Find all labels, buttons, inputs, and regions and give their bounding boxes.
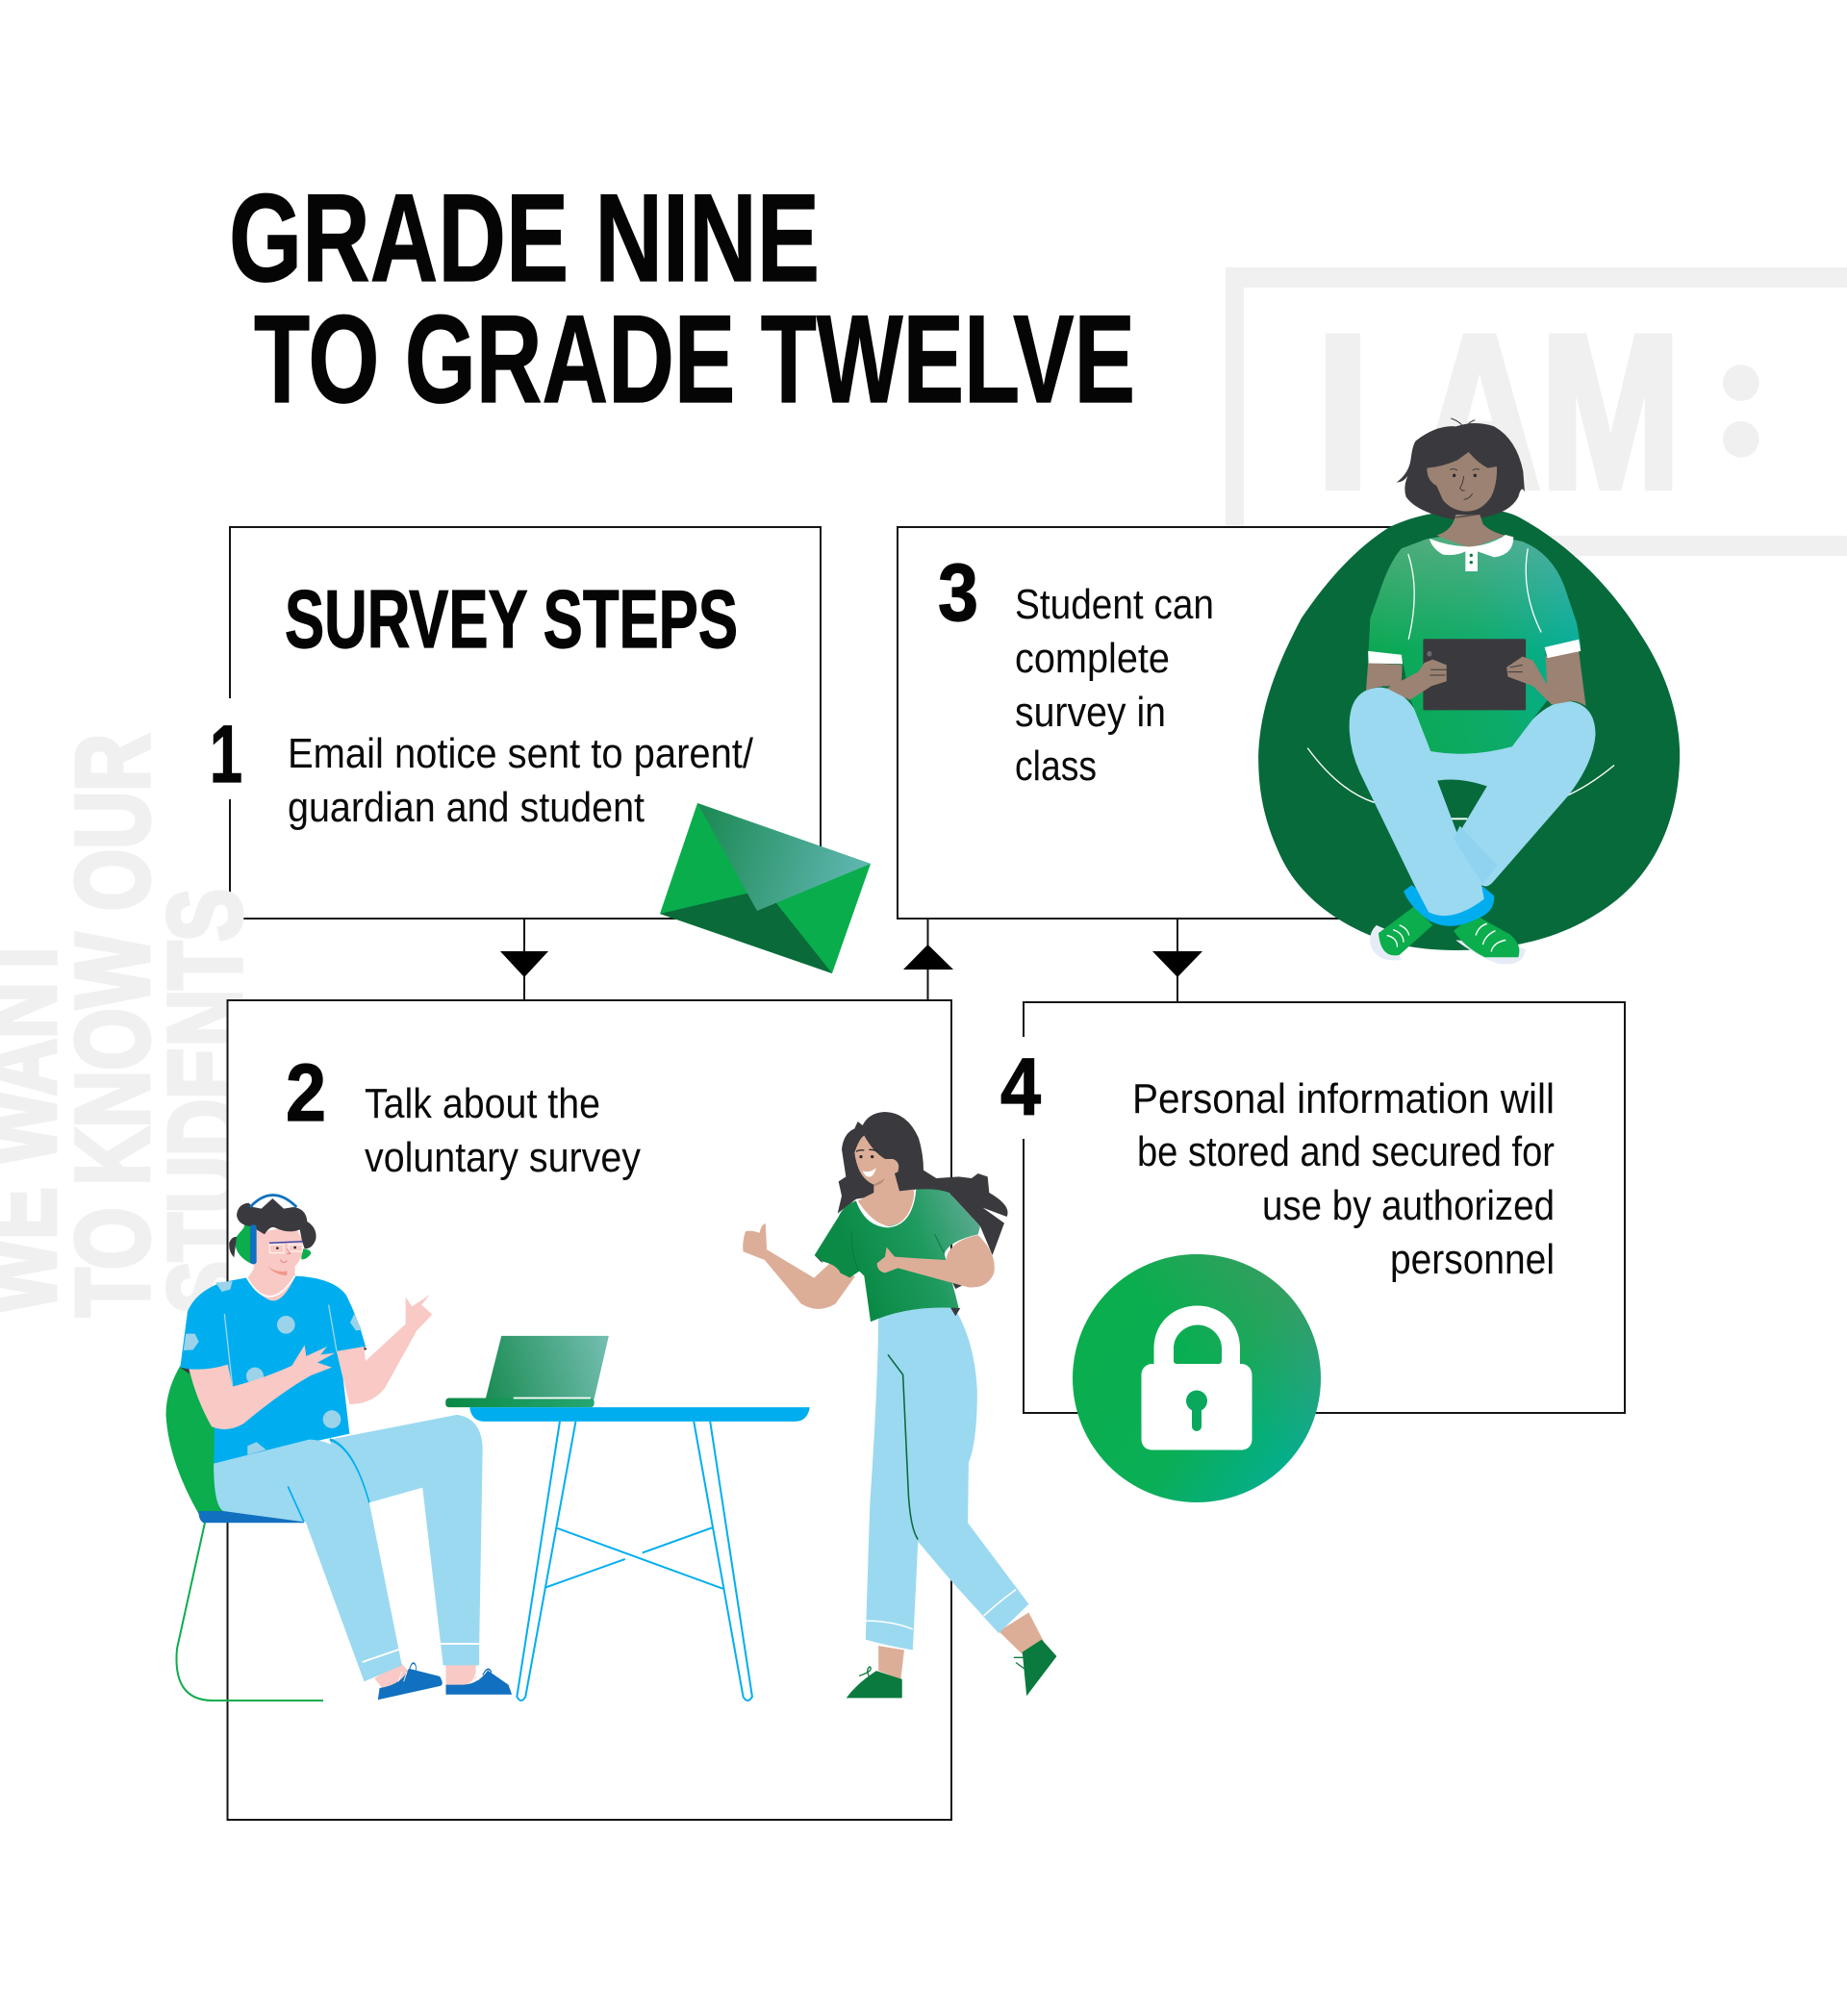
woman right arm and hand [877,1235,995,1287]
hair [1397,418,1525,520]
collar [1430,535,1513,571]
background frame: I AM [1226,267,1847,556]
shoes [1370,906,1526,965]
arrow: step 1 to step 2 [500,919,548,1000]
background frame: I AM: : [1712,294,1771,490]
arrow: step 2 to step 3 [903,919,953,1000]
beanbag creases [1307,748,1614,802]
text: step 3: class [1015,743,1097,790]
arms [1366,651,1586,706]
number 1: 1 [210,709,242,799]
far arm [337,1295,432,1404]
tablet-sitting trousers [1350,688,1596,926]
woman shoes [847,1640,1056,1698]
woman shirt [815,1189,980,1322]
text: step 3: survey in [1015,689,1166,736]
icon: envelope [660,803,871,973]
man trousers and shoes [214,1415,512,1700]
long hair [838,1112,1008,1316]
text: step 4: Personal information will [1132,1075,1555,1122]
background vertical text: STUDENTS [146,889,263,1314]
text: step 4: personnel [1390,1236,1555,1283]
table legs [517,1422,752,1701]
chair seat [198,1511,304,1523]
near arm [190,1345,335,1429]
trousers [866,1299,1028,1650]
table top [469,1407,810,1422]
chair leg [176,1523,323,1701]
illustration: student on beanbag with tablet [1258,418,1680,965]
text: step 2 [365,1080,641,1181]
title [229,167,1135,429]
left arm [743,1223,855,1309]
man head [229,1195,316,1300]
tablet [1387,639,1570,710]
panel: step 2 box [227,1000,951,1820]
text: step 1 [288,730,754,831]
face [1427,452,1497,512]
icon: lock badge [1073,1254,1321,1502]
chair back [165,1363,227,1514]
text: step 3 [1015,581,1214,790]
title: GRADE NINE [229,167,820,308]
beanbag [1258,510,1680,950]
text: step 1: guardian and student [288,784,645,831]
text: step 4: be stored and secured for [1137,1128,1555,1175]
woman face and neck [854,1136,914,1226]
text: step 4: use by authorized [1262,1182,1555,1229]
panel: step 3 box outline [898,527,1443,919]
background vertical text [0,734,263,1317]
panel: step 4 box [1024,1002,1625,1413]
background frame: I AM: AM [1419,290,1681,533]
illustration: table and laptop [445,1336,810,1701]
title: TO GRADE TWELVE [254,289,1135,429]
text: step 3: Student can [1015,581,1214,628]
background frame: I AM: I [1316,290,1370,533]
panel: survey steps box 1 outline [230,527,821,919]
shirt and arms [180,1195,432,1464]
number 3: 3 [938,547,978,638]
shirt [1368,535,1581,754]
illustration: standing woman [743,1112,1056,1698]
number 2: 2 [286,1047,326,1138]
ankles [878,1612,1044,1679]
text: step 2: Talk about the [365,1080,600,1127]
neck [1436,515,1505,548]
laptop [445,1336,609,1407]
illustration: man at table [165,1195,512,1701]
text: step 3: complete [1015,635,1170,682]
text: step 2: voluntary survey [365,1134,641,1181]
number 4: 4 [1000,1042,1041,1132]
text: step 1: Email notice sent to parent/ [288,730,754,777]
background vertical text: TO KNOW OUR [54,734,170,1317]
arrow: step 3 to step 4 [1152,919,1202,1002]
heading: survey steps: SURVEY STEPS [285,574,738,666]
text: step 4 [1132,1075,1555,1283]
